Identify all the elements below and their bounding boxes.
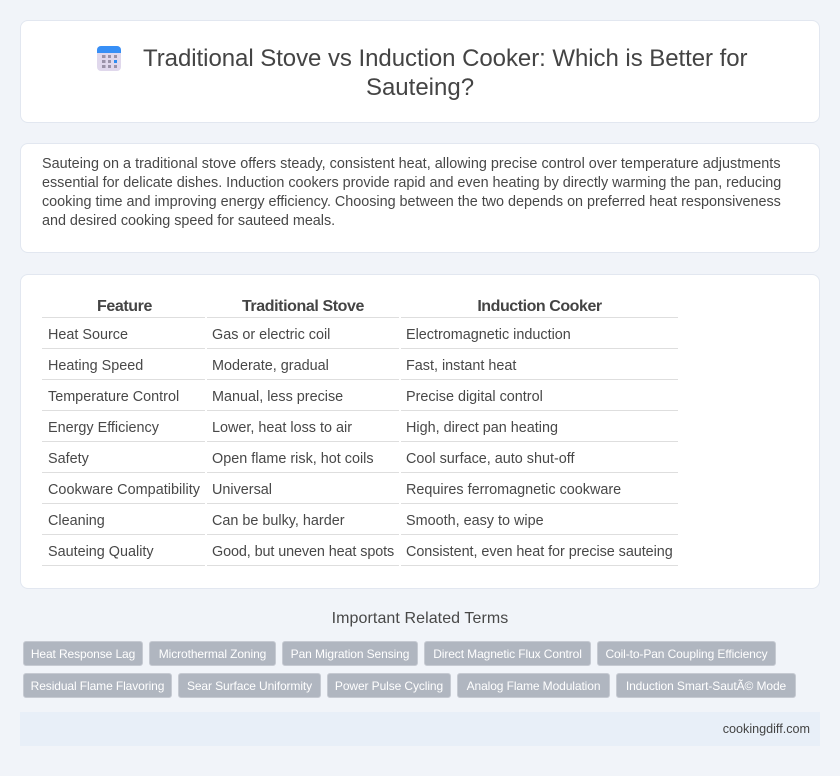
table header: Induction Cooker — [477, 298, 602, 315]
intro text — [42, 156, 781, 229]
row: energy efficiency: Energy Efficiency — [48, 420, 159, 436]
related term tags: Coil-to-Pan Coupling Efficiency — [605, 647, 768, 661]
related term tags: Residual Flame Flavoring — [31, 679, 164, 693]
row: heat source — [42, 327, 678, 349]
title — [143, 45, 748, 101]
row: safety: Safety — [48, 451, 89, 467]
row: temperature control — [42, 389, 678, 411]
table header — [42, 298, 678, 318]
row: heating speed — [42, 358, 678, 380]
related term tags: Analog Flame Modulation — [467, 679, 600, 693]
table header: Feature — [97, 298, 152, 315]
row: temperature control: Temperature Control — [48, 389, 179, 405]
row: safety: Cool surface, auto shut-off — [406, 451, 575, 467]
row: heat source: Gas or electric coil — [212, 327, 330, 343]
intro text: essential for delicate dishes. Induction cookers provide rapid and even heating by directly warming the pan, reducing — [42, 175, 781, 191]
related term tags — [23, 641, 796, 698]
row: energy efficiency — [42, 420, 678, 442]
row: sauteing quality: Consistent, even heat for precise sauteing — [406, 544, 673, 560]
row: temperature control: Precise digital control — [406, 389, 543, 405]
row: heating speed: Heating Speed — [48, 358, 143, 374]
row: cleaning: Smooth, easy to wipe — [406, 513, 544, 529]
icon: calendar grid — [97, 46, 121, 71]
intro text: cooking time and improving energy efficiency. Choosing between the two depends on preferred heat responsiveness — [42, 194, 781, 210]
footer bar — [20, 712, 820, 746]
intro text: Sauteing on a traditional stove offers steady, consistent heat, allowing precise control over temperature adjustments — [42, 156, 781, 172]
row: safety: Open flame risk, hot coils — [212, 451, 374, 467]
row: safety — [42, 451, 678, 473]
row: cleaning — [42, 513, 678, 535]
row: cookware compatibility: Cookware Compatibility — [48, 482, 200, 498]
row: sauteing quality — [42, 544, 678, 566]
row: sauteing quality: Sauteing Quality — [48, 544, 154, 560]
header card — [20, 20, 820, 123]
row: energy efficiency: Lower, heat loss to air — [212, 420, 352, 436]
row: heating speed: Moderate, gradual — [212, 358, 329, 374]
footer domain: cookingdiff.com — [723, 722, 810, 736]
intro text: and desired cooking speed for sauteed meals. — [42, 213, 335, 229]
related term tags: Microthermal Zoning — [159, 647, 266, 661]
related term tags: Heat Response Lag — [31, 647, 135, 661]
title: Traditional Stove vs Induction Cooker: Which is Better for — [143, 45, 747, 72]
related term tags: Power Pulse Cycling — [335, 679, 443, 693]
related term tags: Pan Migration Sensing — [291, 647, 409, 661]
row: cleaning: Can be bulky, harder — [212, 513, 345, 529]
row: cookware compatibility: Requires ferromagnetic cookware — [406, 482, 621, 498]
table header: Traditional Stove — [242, 298, 364, 315]
row: heating speed: Fast, instant heat — [406, 358, 516, 374]
row: heat source: Electromagnetic induction — [406, 327, 571, 343]
related term tags: Induction Smart-SautÃ© Mode — [626, 679, 786, 693]
related term tags: Sear Surface Uniformity — [187, 679, 312, 693]
row: cookware compatibility: Universal — [212, 482, 272, 498]
row: cookware compatibility — [42, 482, 678, 504]
title: Sauteing? — [366, 74, 474, 101]
comparison table card — [20, 274, 820, 589]
related term tags: Direct Magnetic Flux Control — [433, 647, 582, 661]
related terms heading: Important Related Terms — [332, 610, 508, 627]
row: sauteing quality: Good, but uneven heat spots — [212, 544, 394, 560]
row: temperature control: Manual, less precise — [212, 389, 343, 405]
row: heat source: Heat Source — [48, 327, 128, 343]
row: energy efficiency: High, direct pan heating — [406, 420, 558, 436]
row: cleaning: Cleaning — [48, 513, 105, 529]
intro paragraph card — [20, 143, 820, 253]
